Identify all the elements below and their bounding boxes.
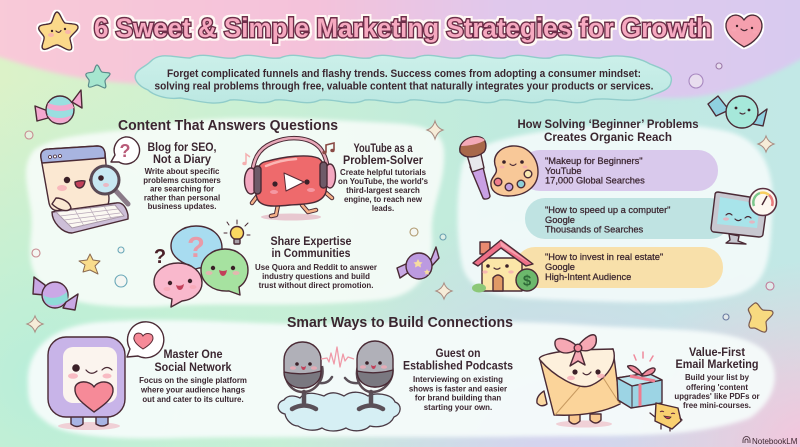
text: YouTube as a problem-solver: Problem-Solver <box>343 153 423 167</box>
text: YouTube as a problem-solver: Create helpful tutorials <box>340 168 427 177</box>
decor: pink candy <box>35 90 82 124</box>
illustration: podcast microphones on a cloud <box>278 341 400 431</box>
subtitle text <box>154 68 654 92</box>
illustration: browser with keyboard and magnifier <box>41 137 140 233</box>
pill: speed up a computer: "How to speed up a computer" <box>545 205 670 215</box>
subtitle text: Forget complicated funnels and flashy trends. Success comes from adopting a consumer mindset: <box>167 68 641 80</box>
text: master one social network: Master One <box>164 347 223 361</box>
text: YouTube as a problem-solver: engine, to reach new <box>344 195 423 204</box>
heading: beginner problems: Creates Organic Reach <box>544 130 672 144</box>
text: value-first email marketing: Build your list by <box>685 373 750 382</box>
left microphone <box>284 342 332 409</box>
text: YouTube as a problem-solver <box>338 141 429 213</box>
text: guest on established podcasts: Guest on <box>436 346 480 360</box>
text: blog for SEO <box>143 140 221 211</box>
icon: dark music note <box>322 143 335 154</box>
text: YouTube as a problem-solver: YouTube as a <box>354 141 413 155</box>
text: guest on established podcasts: starting your own. <box>424 403 492 412</box>
pill: speed up a computer <box>525 198 730 239</box>
text: blog for SEO: Blog for SEO, <box>148 140 216 154</box>
text: blog for SEO: business updates. <box>148 202 216 211</box>
icon: monitor with speed gauge <box>711 188 776 244</box>
decor: right-side candy <box>397 247 439 279</box>
text: blog for SEO: rather than personal <box>144 194 220 202</box>
pill: invest in real estate <box>515 247 723 288</box>
icon: smiling star <box>39 12 78 50</box>
illustration: envelope with bow and gift <box>537 335 682 431</box>
text: master one social network: out and cater to its culture. <box>142 395 244 404</box>
icon: light bulb <box>224 220 250 244</box>
text: YouTube as a problem-solver: third-largest search <box>346 186 420 195</box>
pill: speed up a computer: Google <box>545 215 575 225</box>
illustration: three speech bubbles <box>154 220 250 307</box>
text: share expertise: Share Expertise <box>270 234 352 248</box>
sound wave <box>321 347 354 367</box>
pill: invest in real estate: Google <box>545 262 575 272</box>
icon: heart bubble <box>127 322 164 358</box>
text: value-first email marketing: offering 'content <box>686 383 748 392</box>
icon: makeup brush <box>460 137 490 199</box>
text: value-first email marketing: Email Marketing <box>676 357 758 371</box>
text: share expertise: trust without direct promotion. <box>259 281 373 290</box>
small coupon character <box>650 403 682 431</box>
text: guest on established podcasts: shows is faster and easier <box>409 384 507 394</box>
text: YouTube as a problem-solver: on YouTube, the world's <box>338 177 429 186</box>
text: guest on established podcasts: for brand building than <box>415 394 501 402</box>
bow <box>555 335 596 366</box>
text: master one social network: where your audience hangs <box>140 386 246 394</box>
pill: makeup for beginners: YouTube <box>545 166 582 176</box>
text: share expertise: in Communities <box>272 246 351 260</box>
heading: beginner problems: How Solving ‘Beginner’ Problems <box>518 117 699 131</box>
title: 6 Sweet & Simple Marketing Strategies for Growth <box>94 13 712 43</box>
heading: content that answers questions: Content That Answers Questions <box>118 118 338 134</box>
decor: bubbles <box>25 63 774 320</box>
subtitle cloud <box>135 55 671 103</box>
text: value-first email marketing <box>674 345 760 410</box>
decor: yellow small star <box>79 254 100 274</box>
icon: pink music note <box>242 154 250 165</box>
pill: makeup for beginners: "Makeup for Beginners" <box>545 156 643 166</box>
decor: sparkles <box>27 121 774 332</box>
text: value-first email marketing: upgrades' like PDFs or <box>674 392 760 401</box>
text: YouTube as a problem-solver: leads. <box>372 204 394 213</box>
icon: smiling heart <box>726 15 762 47</box>
text: value-first email marketing: free mini-courses. <box>683 401 751 410</box>
text: share expertise: industry questions and build <box>262 272 370 281</box>
decor: bottom-left candy <box>33 277 78 310</box>
icon: house with dollar coin: $ <box>523 272 532 290</box>
panel: beginner problems <box>458 124 773 302</box>
text: master one social network <box>139 347 247 404</box>
text: master one social network: Focus on the single platform <box>139 376 247 385</box>
text: share expertise: Use Quora and Reddit to answer <box>255 263 377 272</box>
text: value-first email marketing: Value-First <box>689 345 745 359</box>
text: blog for SEO: Not a Diary <box>153 152 211 166</box>
text: blog for SEO: are searching for <box>150 184 214 194</box>
decor: blue candy <box>708 96 767 128</box>
right microphone <box>345 341 393 409</box>
text: master one social network: Social Network <box>154 360 232 374</box>
pill: invest in real estate: "How to invest in real estate" <box>545 252 663 262</box>
pill: invest in real estate: High-Intent Audience <box>545 272 631 282</box>
subtitle text: solving real problems through free, valuable content that naturally integrates your products or services. <box>154 80 654 92</box>
decor: bottom-right star <box>748 303 773 332</box>
brand: NotebookLM: NotebookLM <box>752 437 798 446</box>
text: blog for SEO: Write about specific <box>145 167 220 176</box>
text: guest on established podcasts <box>403 346 513 412</box>
decor: small mint star <box>86 65 110 88</box>
heading: smart ways to build connections: Smart Ways to Build Connections <box>287 315 513 331</box>
icon: house with dollar coin <box>472 240 538 292</box>
panel: content that answers questions <box>26 118 444 307</box>
icon: dark question mark: ? <box>154 246 166 268</box>
panel: smart ways to build connections <box>28 320 775 438</box>
text: guest on established podcasts: Interviewing on existing <box>413 375 503 384</box>
heading: beginner problems <box>518 117 699 144</box>
text: blog for SEO: problems customers <box>143 176 221 185</box>
pill: makeup for beginners: 17,000 Global Searches <box>545 176 645 186</box>
icon: smiling palette <box>491 146 538 196</box>
pill: makeup for beginners <box>520 150 718 191</box>
text: share expertise <box>255 234 377 290</box>
icon: question bubble: ? <box>120 141 130 161</box>
illustration: social app holding a heart <box>48 322 164 430</box>
illustration: three speech bubbles: ? <box>187 232 205 264</box>
pill: speed up a computer: Thousands of Searches <box>545 224 644 234</box>
text: guest on established podcasts: Established Podcasts <box>403 358 513 372</box>
illustration: YouTube character with headphones <box>242 138 336 220</box>
gift box <box>617 352 662 408</box>
